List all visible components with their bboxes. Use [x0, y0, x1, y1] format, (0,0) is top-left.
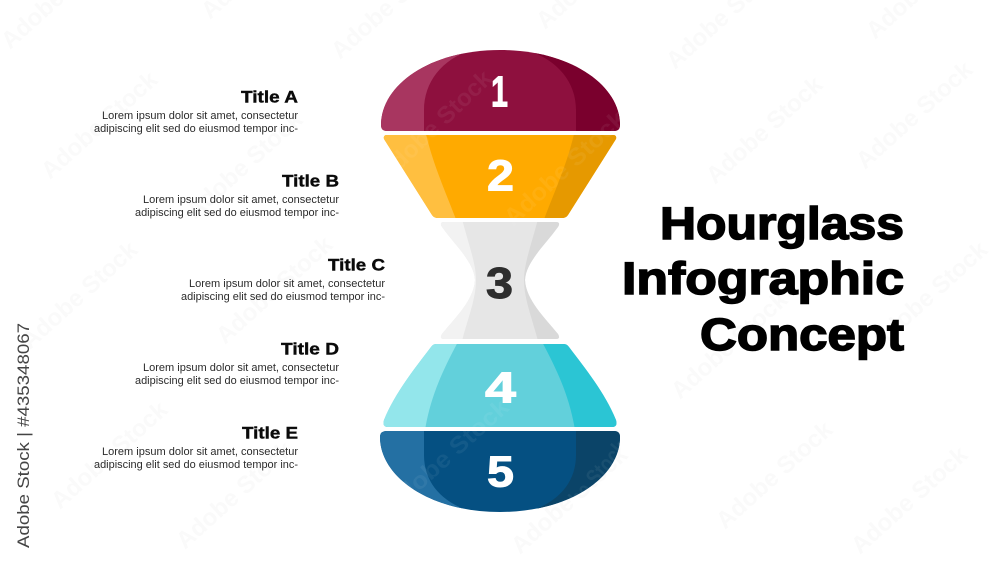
main heading: Infographic [622, 253, 904, 304]
background watermark pattern: Adobe Stock [211, 231, 339, 349]
background watermark pattern: Adobe Stock [36, 66, 164, 184]
background watermark pattern: Adobe Stock [16, 236, 144, 354]
text block: Title E: Title E [242, 424, 298, 442]
number 3: 3 [486, 259, 513, 308]
watermark over hourglass: Adobe Stock [379, 393, 515, 519]
text block: Title E: adipiscing elit sed do eiusmod tempor inc- [94, 459, 298, 471]
text block: Title A [94, 88, 298, 135]
watermark over hourglass: Adobe Stock [367, 261, 476, 360]
number 2: 2 [487, 152, 514, 200]
watermark over hourglass: Adobe Stock [499, 105, 632, 231]
text block: Title B: Title B [282, 172, 339, 190]
background watermark pattern: Adobe Stock [666, 286, 794, 404]
segment 5: navy bottom bulb [380, 431, 620, 512]
watermark over hourglass: Adobe Stock [372, 65, 498, 187]
main heading: Concept [700, 309, 904, 360]
background watermark pattern: Adobe Stock [851, 56, 979, 174]
background watermark pattern: Adobe Stock [866, 236, 994, 354]
main heading [622, 198, 904, 360]
segment 1: maroon top bulb [381, 50, 620, 131]
background watermark pattern: Adobe Stock [171, 436, 299, 554]
background watermark pattern: Adobe Stock [46, 396, 174, 514]
watermark over hourglass: Adobe Stock [541, 435, 634, 539]
number 5: 5 [487, 448, 514, 496]
hourglass diagram [380, 50, 620, 512]
text block: Title D: Title D [281, 340, 339, 358]
text block: Title B: Lorem ipsum dolor sit amet, consectetur [143, 194, 339, 206]
text block: Title A: Title A [241, 88, 298, 106]
text block: Title C: Lorem ipsum dolor sit amet, consectetur [189, 278, 385, 290]
text block: Title C [181, 256, 385, 303]
segment 3: grey neck [441, 222, 559, 339]
background watermark pattern: Adobe Stock [181, 106, 309, 224]
background watermark pattern: Adobe Stock [506, 441, 634, 559]
watermark over hourglass [367, 65, 634, 539]
text block: Title D [135, 340, 339, 387]
number 1: 1 [491, 68, 508, 116]
text block: Title B [135, 172, 339, 219]
text block: Title D: adipiscing elit sed do eiusmod tempor inc- [135, 375, 339, 387]
background watermark pattern: Adobe Stock [846, 441, 974, 559]
text block: Title C: Title C [328, 256, 385, 274]
text block: Title A: adipiscing elit sed do eiusmod tempor inc- [94, 123, 298, 135]
text block: Title E: Lorem ipsum dolor sit amet, consectetur [102, 446, 298, 458]
text block: Title A: Lorem ipsum dolor sit amet, consectetur [102, 110, 298, 122]
main heading: Hourglass [660, 198, 904, 249]
text block: Title E [94, 424, 298, 471]
background watermark pattern: Adobe Stock [711, 416, 839, 534]
segment 4: light teal funnel [384, 344, 616, 427]
side credit: stock id: Adobe Stock | #435348067 [14, 323, 33, 548]
text block: Title C: adipiscing elit sed do eiusmod tempor inc- [181, 291, 385, 303]
number 4: 4 [485, 364, 517, 412]
text block: Title B: adipiscing elit sed do eiusmod tempor inc- [135, 207, 339, 219]
text block: Title D: Lorem ipsum dolor sit amet, consectetur [143, 362, 339, 374]
background watermark pattern: Adobe Stock [701, 71, 829, 189]
segment 2: amber funnel [384, 135, 616, 218]
